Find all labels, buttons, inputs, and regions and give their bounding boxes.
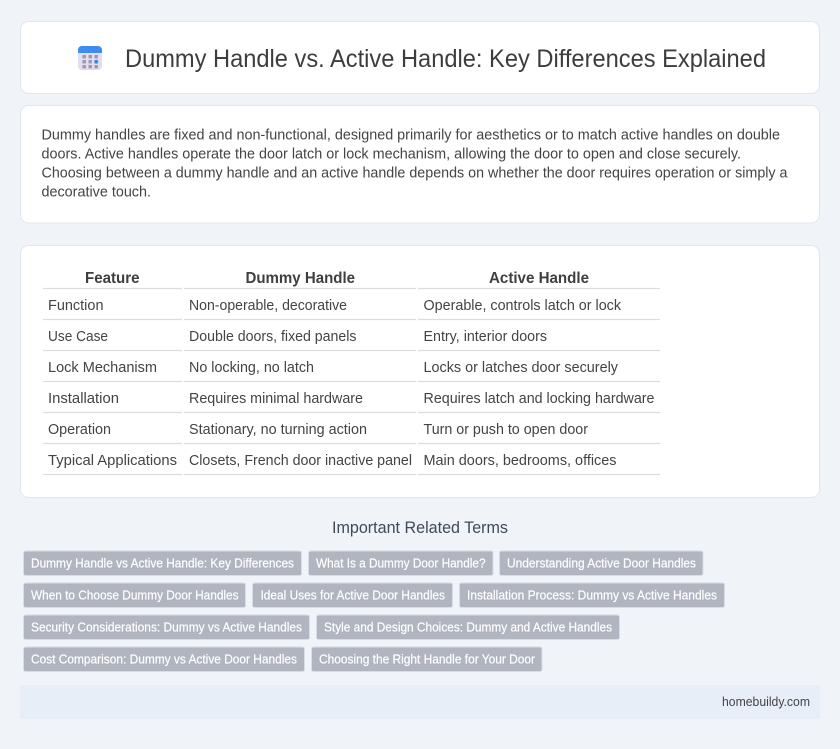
tag: Ideal Uses for Active Door Handles (260, 588, 445, 602)
row: installation: Installation (48, 391, 119, 407)
footer bar (20, 685, 820, 719)
row: lock mechanism: Locks or latches door securely (424, 360, 619, 376)
row: installation: Requires latch and locking hardware (424, 391, 654, 407)
related terms tags (24, 551, 724, 672)
row: function: Non-operable, decorative (189, 298, 347, 314)
row: function (48, 298, 622, 314)
row: operation: Turn or push to open door (424, 422, 588, 438)
description text: doors. Active handles operate the door latch or lock mechanism, allowing the door to open and close securely. (42, 146, 741, 162)
row: use case: Use Case (48, 329, 108, 345)
row: function: Operable, controls latch or lock (424, 298, 622, 314)
table header row (85, 270, 589, 287)
row: lock mechanism: No locking, no latch (189, 360, 314, 376)
row: operation: Stationary, no turning action (189, 422, 367, 438)
row: use case: Entry, interior doors (424, 329, 547, 345)
row: typical applications: Closets, French door inactive panel (189, 453, 412, 469)
tag (24, 583, 246, 608)
icon: calendar (78, 46, 102, 70)
tag: Security Considerations: Dummy vs Active Handles (31, 620, 302, 634)
footer source text: homebuildy.com (722, 695, 810, 709)
tag: Cost Comparison: Dummy vs Active Door Handles (31, 652, 297, 666)
row: installation (48, 391, 654, 407)
table header row: Active Handle (489, 270, 589, 287)
tag: Dummy Handle vs Active Handle: Key Differences (31, 556, 294, 570)
table header row: Dummy Handle (246, 270, 355, 287)
tag: Understanding Active Door Handles (507, 556, 696, 570)
tag (252, 583, 452, 608)
row: function: Function (48, 298, 104, 314)
tag (312, 647, 542, 672)
row: use case: Double doors, fixed panels (189, 329, 356, 345)
row: operation: Operation (48, 422, 111, 438)
tag (460, 583, 724, 608)
row: use case (48, 329, 547, 345)
row: typical applications: Main doors, bedrooms, offices (424, 453, 616, 469)
description text (42, 127, 788, 201)
description text: Choosing between a dummy handle and an active handle depends on whether the door requires operation or simply a (42, 166, 788, 182)
row: typical applications: Typical Applications (48, 453, 177, 469)
tag: What Is a Dummy Door Handle? (316, 556, 486, 570)
header panel (20, 22, 820, 94)
tag (24, 647, 304, 672)
description text: Dummy handles are fixed and non-functional, designed primarily for aesthetics or to match active handles on double (42, 127, 780, 143)
description panel (20, 106, 820, 223)
row: lock mechanism: Lock Mechanism (48, 360, 157, 376)
tag: When to Choose Dummy Door Handles (31, 588, 238, 602)
tag (24, 615, 310, 640)
tag (316, 615, 620, 640)
row: installation: Requires minimal hardware (189, 391, 363, 407)
row: lock mechanism (48, 360, 619, 376)
tag: Style and Design Choices: Dummy and Active Handles (324, 620, 612, 634)
tag (500, 551, 703, 576)
tag: Installation Process: Dummy vs Active Handles (467, 588, 717, 602)
tag (308, 551, 493, 576)
comparison table panel (20, 246, 820, 498)
tag: Choosing the Right Handle for Your Door (319, 652, 535, 666)
table header row: Feature (85, 270, 140, 287)
row: typical applications (48, 453, 616, 469)
description text: decorative touch. (42, 185, 151, 201)
related terms heading: Important Related Terms (332, 519, 508, 537)
title: Dummy Handle vs. Active Handle: Key Differences Explained (125, 45, 766, 73)
tag (24, 551, 302, 576)
row: operation (48, 422, 588, 438)
